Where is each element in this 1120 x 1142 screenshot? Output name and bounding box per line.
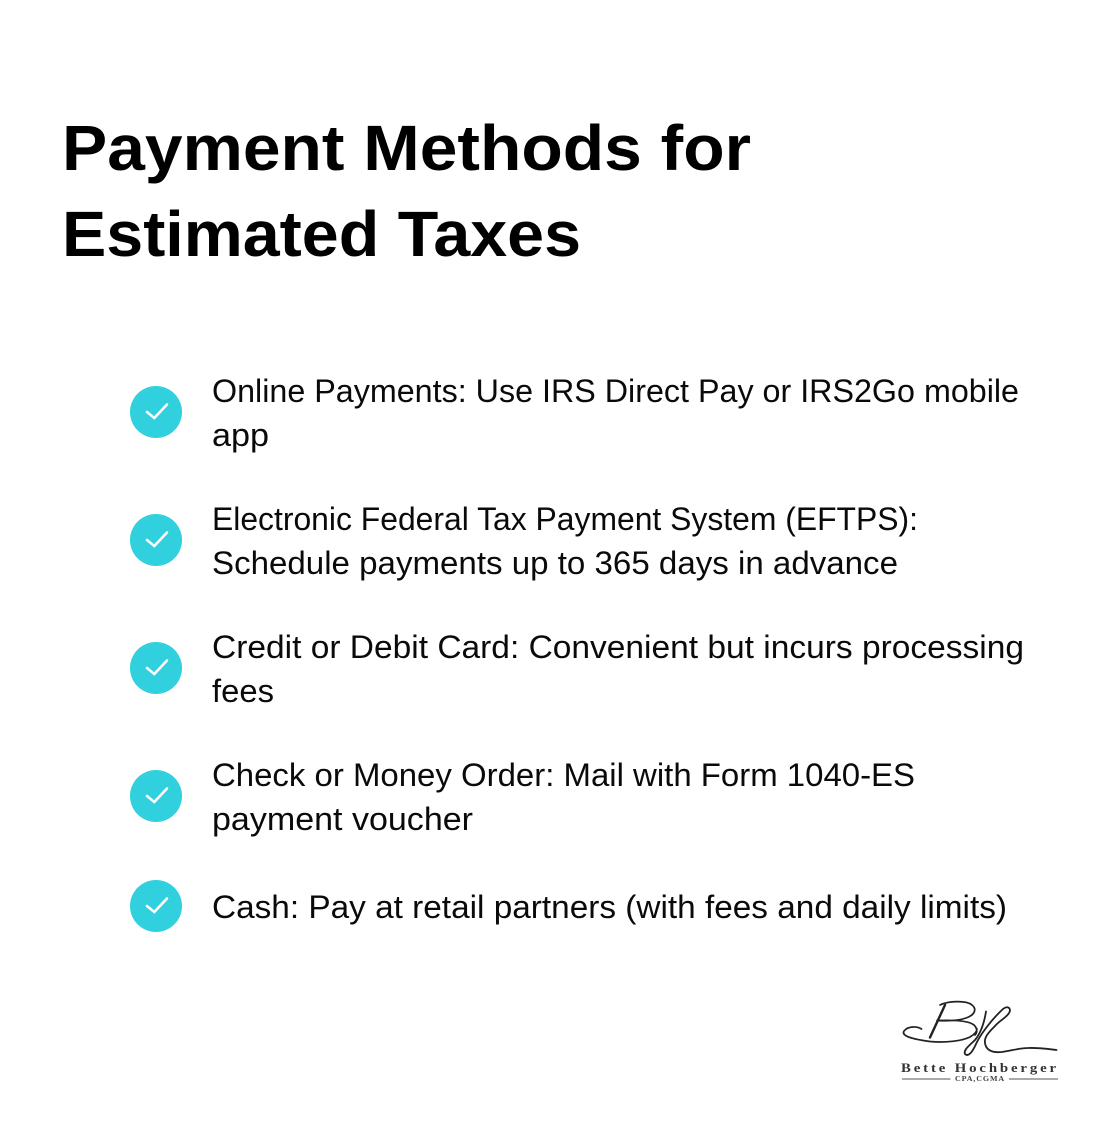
text: name: Bette Hochberger	[901, 1060, 1059, 1075]
icon: check circle online	[130, 386, 182, 438]
list item: cash	[130, 880, 1007, 932]
icon: check circle cash	[130, 880, 182, 932]
text: EFTPS: Schedule payments up to 365 days in advance	[212, 545, 898, 581]
text: online payments: app	[212, 417, 269, 453]
icon: check circle EFTPS	[130, 514, 182, 566]
text: credit or debit card: fees	[212, 673, 274, 709]
title: Estimated Taxes	[62, 198, 581, 270]
icon: check circle card	[130, 642, 182, 694]
text: credentials: CPA,CGMA	[955, 1074, 1005, 1083]
text: online payments: Online Payments: Use IRS Direct Pay or IRS2Go mobile	[212, 373, 1019, 409]
icon: BH signature	[904, 1002, 1056, 1055]
text: credit or debit card	[212, 629, 1024, 709]
icon: check circle money order	[130, 770, 182, 822]
title: Payment Methods for	[62, 112, 751, 184]
text: check or money order	[212, 757, 915, 837]
text: EFTPS: Electronic Federal Tax Payment System (EFTPS):	[212, 501, 918, 537]
title	[62, 112, 751, 270]
text: check or money order: Check or Money Order: Mail with Form 1040-ES	[212, 757, 915, 793]
list item: check or money order	[130, 757, 915, 837]
text: check or money order: payment voucher	[212, 801, 473, 837]
list item: online payments	[130, 373, 1019, 453]
text: cash: Cash: Pay at retail partners (with fees and daily limits)	[212, 889, 1007, 925]
text: EFTPS	[212, 501, 918, 581]
list item: credit or debit card	[130, 629, 1024, 709]
list item: EFTPS	[130, 501, 918, 581]
text: online payments	[212, 373, 1019, 453]
text: credit or debit card: Credit or Debit Card: Convenient but incurs processing	[212, 629, 1024, 665]
logo: Bette Hochberger signature	[901, 1002, 1059, 1083]
